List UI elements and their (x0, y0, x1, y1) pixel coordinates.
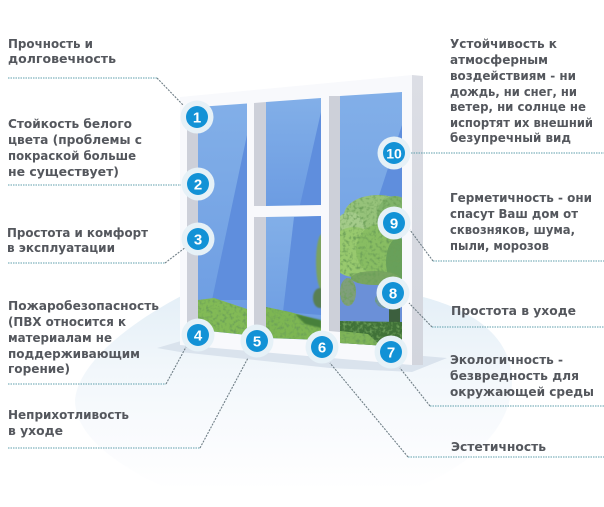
text: airtightness: пыли, морозов (450, 239, 549, 253)
text: white colour resistance: покраской больше (8, 149, 136, 163)
text: airtightness: сквозняков, шума, (450, 223, 575, 237)
text: weather resistance: воздействиям - ни (450, 69, 576, 83)
text: airtightness (450, 191, 592, 253)
marker 6 (306, 330, 338, 364)
leader line 3 (8, 262, 165, 264)
text: weather resistance: испортят их внешний (450, 116, 593, 130)
text: weather resistance: ветер, ни солнце не (450, 100, 586, 114)
text: airtightness: Герметичность - они (450, 191, 592, 205)
leader line 8 (432, 326, 604, 328)
marker 10 (378, 136, 410, 170)
marker 8 (376, 276, 410, 310)
tree foliage (340, 195, 402, 308)
marker 7 (374, 336, 408, 368)
text: low maintenance: в уходе (8, 424, 63, 438)
text: strength and durability: долговечность (8, 52, 116, 66)
leader line 2 (8, 184, 181, 186)
text: white colour resistance: Стойкость белого (8, 117, 132, 131)
marker 2 (182, 168, 214, 200)
text: fire safety: поддерживающим (8, 347, 140, 361)
pane: right with tree (340, 92, 402, 346)
marker 7: 7 (387, 344, 395, 362)
text: fire safety: горение) (8, 362, 70, 376)
text: simplicity and comfort: Простота и комфорт (7, 226, 148, 240)
marker 3 (182, 222, 214, 256)
background: pale blue floor (75, 294, 512, 490)
text: strength and durability: Прочность и (8, 37, 93, 51)
text: weather resistance (450, 37, 593, 145)
text: airtightness: спасут Ваш дом от (450, 207, 578, 221)
text: fire safety: материалам не (8, 331, 112, 345)
marker 5 (240, 324, 274, 358)
leader line 6 (408, 456, 604, 458)
leader line 4 (8, 383, 166, 385)
text: weather resistance: безупречный вид (450, 131, 571, 145)
text: eco-friendliness: безвредность для (450, 369, 579, 383)
text: aesthetics: Эстетичность (451, 440, 546, 454)
text: simplicity and comfort: в эксплуатации (7, 241, 115, 255)
text: weather resistance: атмосферным (450, 53, 548, 67)
text: eco-friendliness (450, 353, 594, 399)
marker 2: 2 (194, 176, 202, 194)
text: fire safety: (ПВХ относится к (8, 315, 126, 329)
text: simplicity and comfort (7, 226, 148, 255)
marker 8: 8 (389, 286, 397, 302)
leader line 1 (8, 77, 157, 79)
marker 4: 4 (194, 328, 203, 344)
pane: middle upper (266, 98, 321, 206)
window illustration (157, 75, 447, 372)
marker 1: 1 (193, 110, 201, 126)
marker 4 (182, 318, 214, 352)
marker 5: 5 (253, 334, 261, 350)
marker 6: 6 (318, 340, 326, 356)
text: fire safety (8, 299, 159, 376)
text: eco-friendliness: окружающей среды (450, 385, 594, 399)
text: low maintenance (8, 408, 129, 438)
text: white colour resistance: не существует) (8, 165, 119, 179)
text: weather resistance: Устойчивость к (450, 37, 557, 51)
marker 9: 9 (390, 216, 398, 232)
marker 3: 3 (194, 232, 202, 248)
text: easy care: Простота в уходе (451, 304, 576, 318)
window frame right side (412, 75, 423, 365)
text: low maintenance: Неприхотливость (8, 408, 129, 422)
text: weather resistance: дождь, ни снег, ни (450, 85, 577, 99)
window frame front (180, 75, 412, 365)
pane: left (198, 104, 247, 335)
text: strength and durability (8, 37, 116, 66)
marker 10: 10 (386, 146, 402, 162)
marker 9 (378, 206, 410, 240)
text: white colour resistance (8, 117, 142, 179)
leader line 5 (8, 447, 200, 449)
pane: middle lower (266, 216, 321, 340)
leader line 10 (411, 152, 604, 154)
text: white colour resistance: цвета (проблемы с (8, 133, 142, 147)
text: eco-friendliness: Экологичность - (450, 353, 563, 367)
text: fire safety: Пожаробезопасность (8, 299, 159, 313)
leader line 7 (430, 405, 604, 407)
leader line 9 (433, 260, 604, 262)
inner gray reveals (187, 96, 340, 332)
hedge and grass (340, 321, 402, 348)
window shadow on floor (157, 341, 447, 372)
marker 1 (180, 100, 214, 134)
